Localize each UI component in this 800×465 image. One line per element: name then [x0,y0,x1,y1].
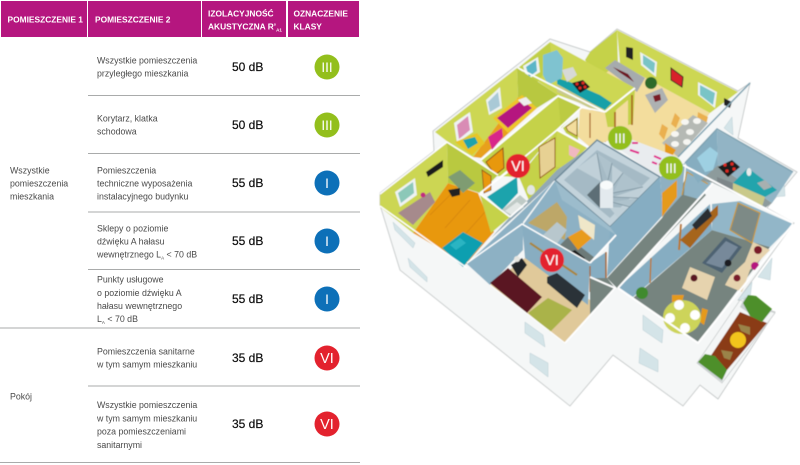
row 3 [97,166,340,202]
row 5: < 70 dB [105,314,138,324]
row 7: 35 dB [232,417,263,431]
row 7: poza pomieszczeniami [97,426,186,436]
row 5: Punkty usługowe [97,274,164,284]
table header: POMIESZCZENIE 1 [8,14,83,24]
row 4: dźwięku A hałasu [97,236,165,246]
row 7: Wszystkie pomieszczenia [97,400,197,410]
row 1 [97,54,340,80]
table header: A1 [276,28,282,32]
table header [1,1,359,37]
row 7: VI [320,417,334,433]
row 1: przyległego mieszkania [97,68,189,78]
row 5: A [102,320,105,325]
column 1: all rooms: Wszystkie [10,166,50,176]
row 5: L [97,314,138,325]
room: lower left bedroom [380,142,498,268]
row 6: 35 dB [232,351,263,365]
row 2: 50 dB [232,118,263,132]
row 4: wewnętrznego L [96,250,197,260]
stairwell [555,140,660,227]
room: bathroom with teal wall [480,165,535,233]
room: living room top right [585,30,738,157]
isometric apartment plan [380,29,797,406]
row 4: A [161,256,164,260]
badge: VI bathroom [506,154,530,178]
row 3: I [325,176,329,191]
room: kitchen top [518,42,635,142]
row 7: w tym samym mieszkaniu [96,414,197,424]
row 5 [97,274,340,325]
room: child bedroom [435,68,558,158]
room: dark bedroom [467,182,590,343]
row 2: schodowa [97,126,137,136]
room: living room lower right [618,183,793,343]
row 4: I [325,234,329,249]
badge: VI bedroom: VI [545,253,559,269]
row 2: III [321,118,333,133]
row 5: hałasu wewnętrznego [97,301,182,311]
row 3: Pomieszczenia [97,166,156,176]
row 2: Korytarz, klatka [97,114,158,124]
badge: III corridor [608,126,632,150]
row 2 [97,112,340,138]
row 6 [96,346,340,370]
row 7 [96,400,340,450]
partition wall and hall [481,96,610,238]
row 3: instalacyjnego budynku [97,192,189,202]
column 1: all rooms: pomieszczenia [10,178,68,188]
hall floor and orange door [607,163,712,288]
balcony [697,295,775,383]
row 1: Wszystkie pomieszczenia [97,56,197,66]
row 4: < 70 dB [164,250,197,260]
column 1: room: Pokój [10,392,32,402]
row 4: Sklepy o poziomie [97,224,168,234]
row 5: I [325,292,329,307]
table header: IZOLACYJNOŚĆ [208,8,274,18]
table body [0,54,360,462]
badge: III corridor: III [614,131,626,146]
row 3: techniczne wyposażenia [97,178,192,188]
row 4 [96,224,340,260]
badge: VI bathroom: VI [511,159,525,175]
table header: KLASY [294,22,322,32]
badge: III stairs: III [665,161,677,176]
column 1: all rooms: mieszkania [10,192,54,202]
row 6: VI [320,351,334,367]
table header: AKUSTYCZNA R’ [208,22,276,32]
exterior windows [393,117,785,377]
badge: VI bedroom [540,248,564,272]
table header: OZNACZENIE [294,8,348,18]
closet [565,235,616,343]
corridor wall with pink marks [607,140,678,177]
table header: POMIESZCZENIE 2 [95,14,171,24]
row 3: 55 dB [232,176,263,190]
row 6: Pomieszczenia sanitarne [97,346,195,356]
row 4: 55 dB [232,234,263,248]
room: kitchen right [678,83,793,223]
building shell [380,29,797,406]
row 1: 50 dB [232,60,263,74]
row 5: 55 dB [232,292,263,306]
room: bathroom with shower [523,177,663,277]
row 6: w tym samym mieszkaniu [96,360,197,370]
row 5: o poziomie dźwięku A [97,288,182,298]
row 1: III [321,60,333,75]
row 7: sanitarnymi [97,440,142,450]
badge: III stairs [659,156,683,180]
